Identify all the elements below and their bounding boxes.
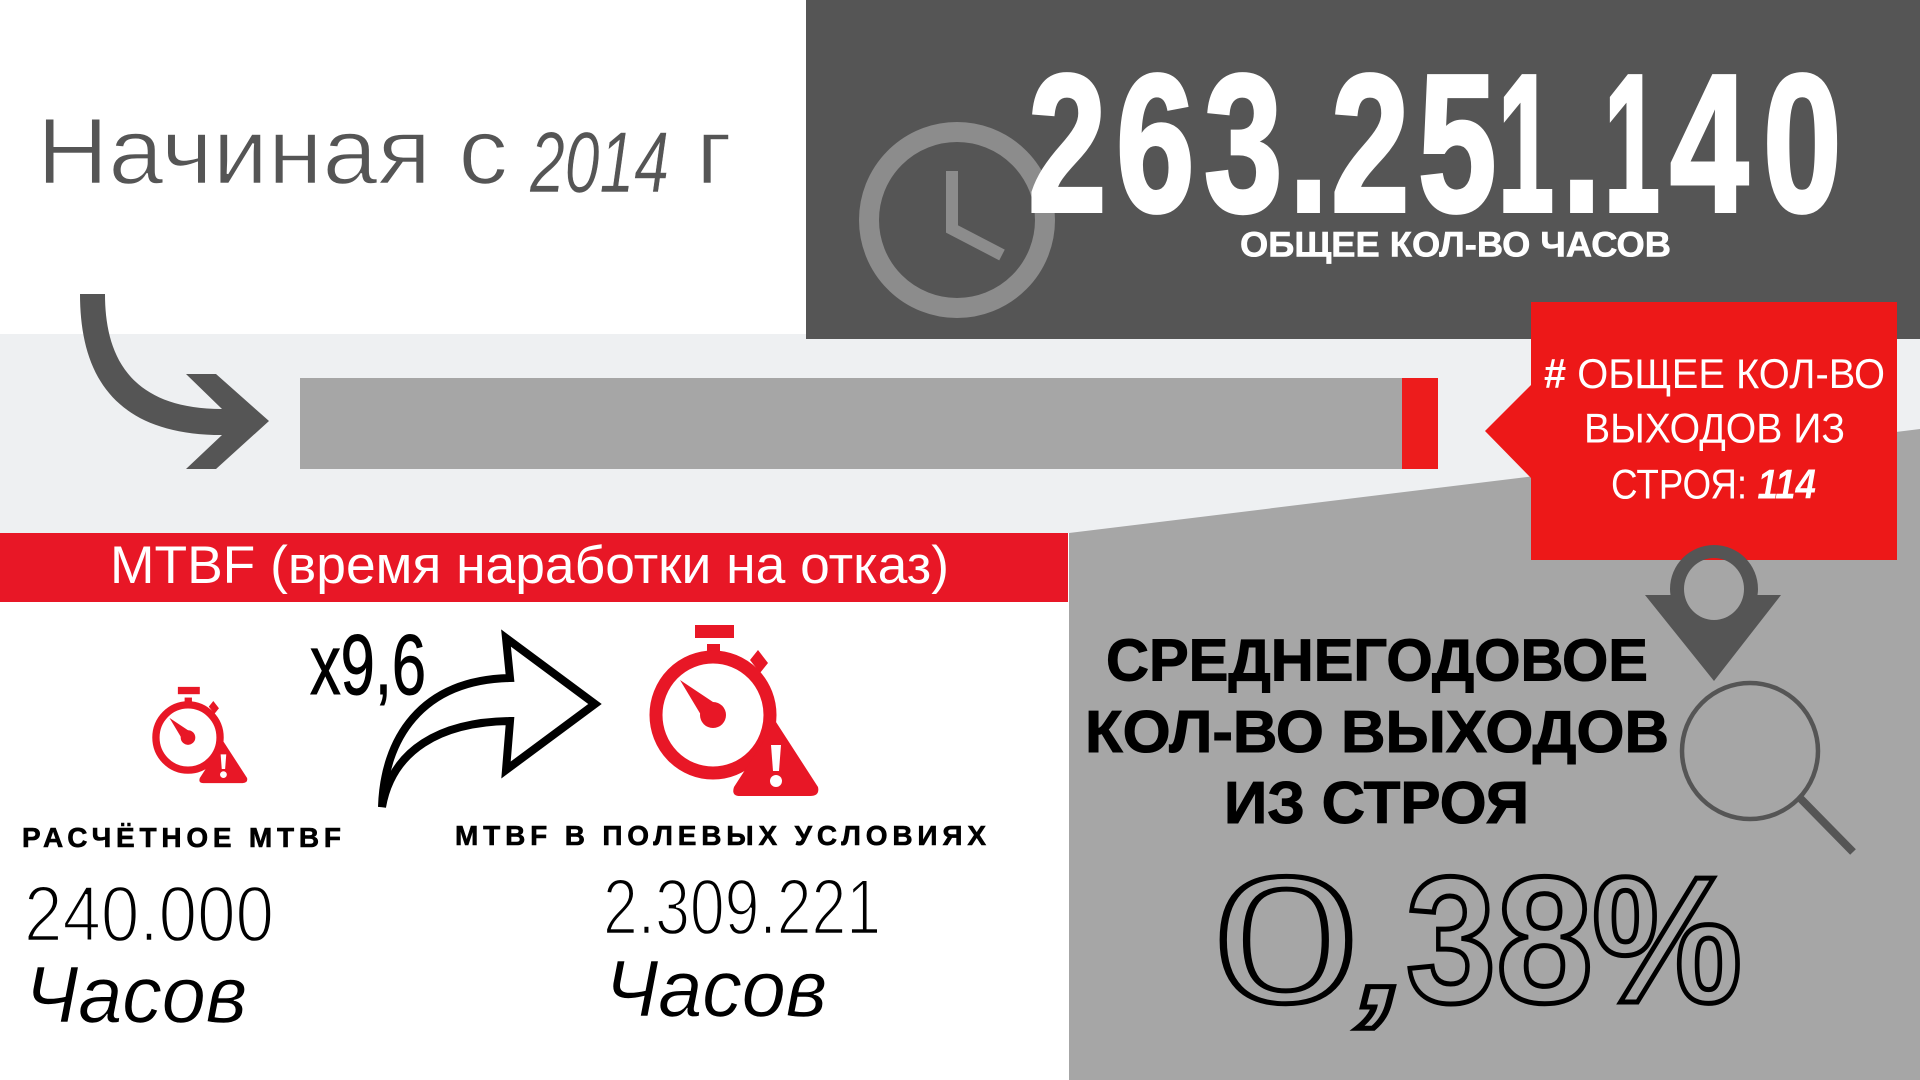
big number: total hours: 40 [1670,34,1841,253]
arrow: curved timeline arrow [80,294,269,469]
big number: total hours [1028,34,1841,253]
heading: average annual failures [1085,628,1669,836]
big number: total hours: 263.25 [1028,34,1496,253]
big number: total hours: 1 [1498,34,1554,253]
value: 0,38 percent outlined: , [1356,884,1408,1037]
value: calculated MTBF hours [24,869,274,1039]
title: Начиная с [37,98,508,204]
panel: dark total hours [806,0,1920,339]
value: 0,38 percent outlined: 3 [1406,840,1496,1041]
heading: average annual failures: КОЛ-ВО ВЫХОДОВ [1085,699,1669,765]
big number: total hours: . [1562,34,1601,253]
value: calculated MTBF hours: Часов [25,950,247,1039]
callout: total failures: ВЫХОДОВ ИЗ [1584,404,1845,452]
value: field MTBF hours: 2.309.221 [603,862,881,951]
value: 0,38 percent outlined: % [1592,840,1742,1041]
label: field MTBF: MTBF В ПОЛЕВЫХ УСЛОВИЯХ [455,820,986,851]
value: field MTBF hours [603,862,881,1033]
big number: total hours: 1 [1604,34,1660,253]
panel: light band background [0,334,1920,533]
icon: location pin [1645,545,1781,681]
title: г [696,98,732,204]
icon: clock [869,132,1045,308]
icon: small stopwatch [156,687,247,783]
callout: total failures [1485,302,1897,560]
bar: hours timeline [300,378,1438,469]
value: calculated MTBF hours: 240.000 [24,869,274,958]
value: field MTBF hours: Часов [605,944,827,1033]
value: 0,38 percent outlined [1213,840,1742,1041]
icon: magnifier [1682,683,1853,852]
label: calculated MTBF: РАСЧЁТНОЕ MTBF [22,822,341,853]
title [37,98,732,211]
value: 0,38 percent outlined: 8 [1496,840,1593,1041]
multiplier value: x9,6 [310,618,426,713]
heading: average annual failures: СРЕДНЕГОДОВОЕ [1106,628,1648,694]
heading: average annual failures: ИЗ СТРОЯ [1224,770,1529,836]
label: total hours: ОБЩЕЕ КОЛ-ВО ЧАСОВ [1240,226,1671,264]
arrow: curved multiplier arrow [382,638,595,807]
heading band: MTBF [0,533,1068,602]
heading band: MTBF: MTBF (время наработки на отказ) [110,536,949,595]
callout: total failures: # ОБЩЕЕ КОЛ-ВО [1544,350,1885,397]
panel: gray slanted panel [1069,429,1920,1080]
value: 0,38 percent outlined: 0 [1213,840,1359,1041]
title: 2014 [529,115,669,211]
icon: large stopwatch [656,625,818,796]
callout: total failures: СТРОЯ: 114 [1611,460,1816,508]
